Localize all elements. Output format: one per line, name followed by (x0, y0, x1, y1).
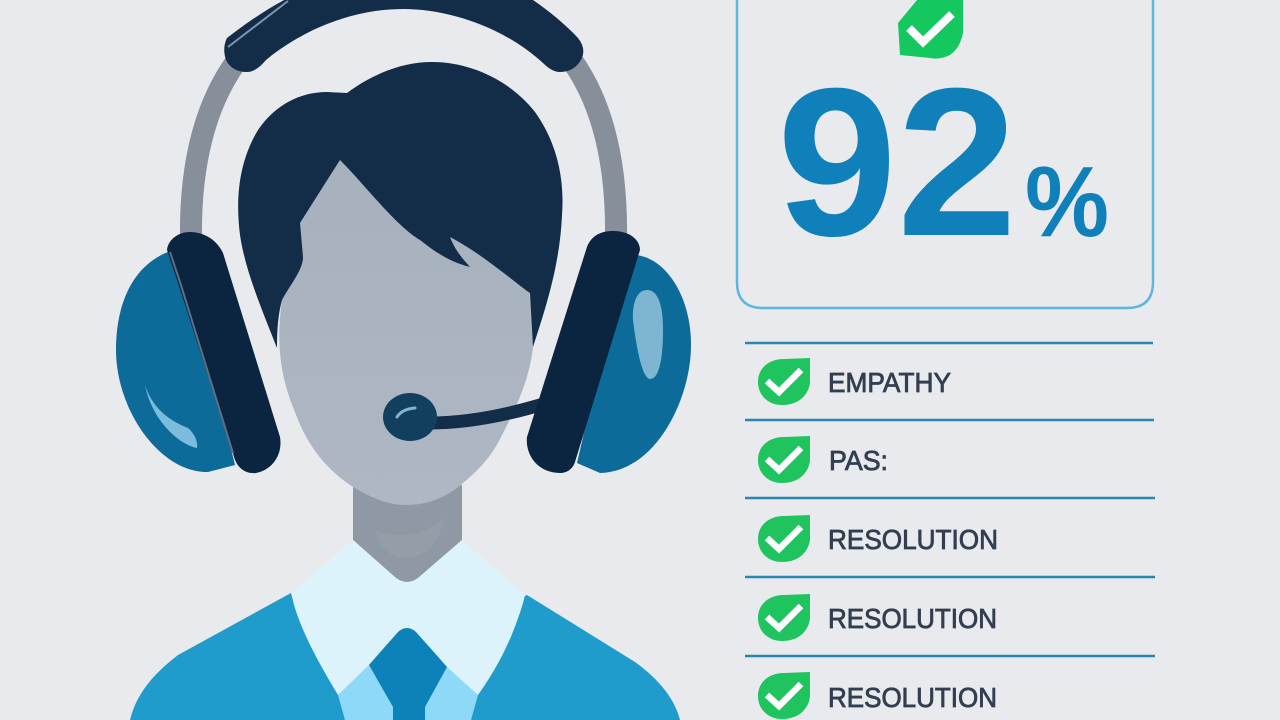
microphone boom (430, 402, 550, 423)
item: resolution 2: RESOLUTION (828, 603, 997, 634)
microphone (383, 393, 437, 441)
headband right arm (573, 62, 616, 238)
shirt lower panels (338, 660, 478, 720)
left pad edge (170, 252, 233, 453)
hair (238, 62, 563, 348)
score panel frame (737, 0, 1153, 308)
face (279, 160, 535, 505)
panel: 92% score (737, 0, 1153, 308)
right ear cup (577, 255, 691, 473)
shirt collar (291, 540, 525, 695)
left cup highlight (145, 385, 197, 448)
item: empathy: EMPATHY (828, 367, 951, 398)
tie (369, 628, 447, 720)
headband top pad (224, 0, 583, 72)
item: empathy (758, 358, 951, 405)
right ear pad (527, 231, 640, 473)
neck (353, 485, 462, 582)
score percent sign: % (1025, 146, 1109, 258)
right cup highlight (633, 290, 663, 379)
item: pass: PAS: (829, 445, 888, 476)
item: resolution 2 (758, 594, 997, 641)
score value: 92 (777, 44, 1017, 280)
icon: score check (898, 0, 963, 59)
left ear pad (167, 232, 280, 473)
headband left arm (191, 62, 236, 238)
item: resolution 1: RESOLUTION (828, 524, 998, 555)
item: resolution 1 (758, 515, 998, 562)
left ear cup (116, 252, 235, 472)
checklist (745, 343, 1155, 719)
suit jacket (130, 593, 680, 720)
item: resolution 3: RESOLUTION (828, 682, 997, 713)
item: pass (758, 436, 888, 483)
item: resolution 3 (758, 672, 997, 719)
agent illustration (116, 0, 691, 720)
